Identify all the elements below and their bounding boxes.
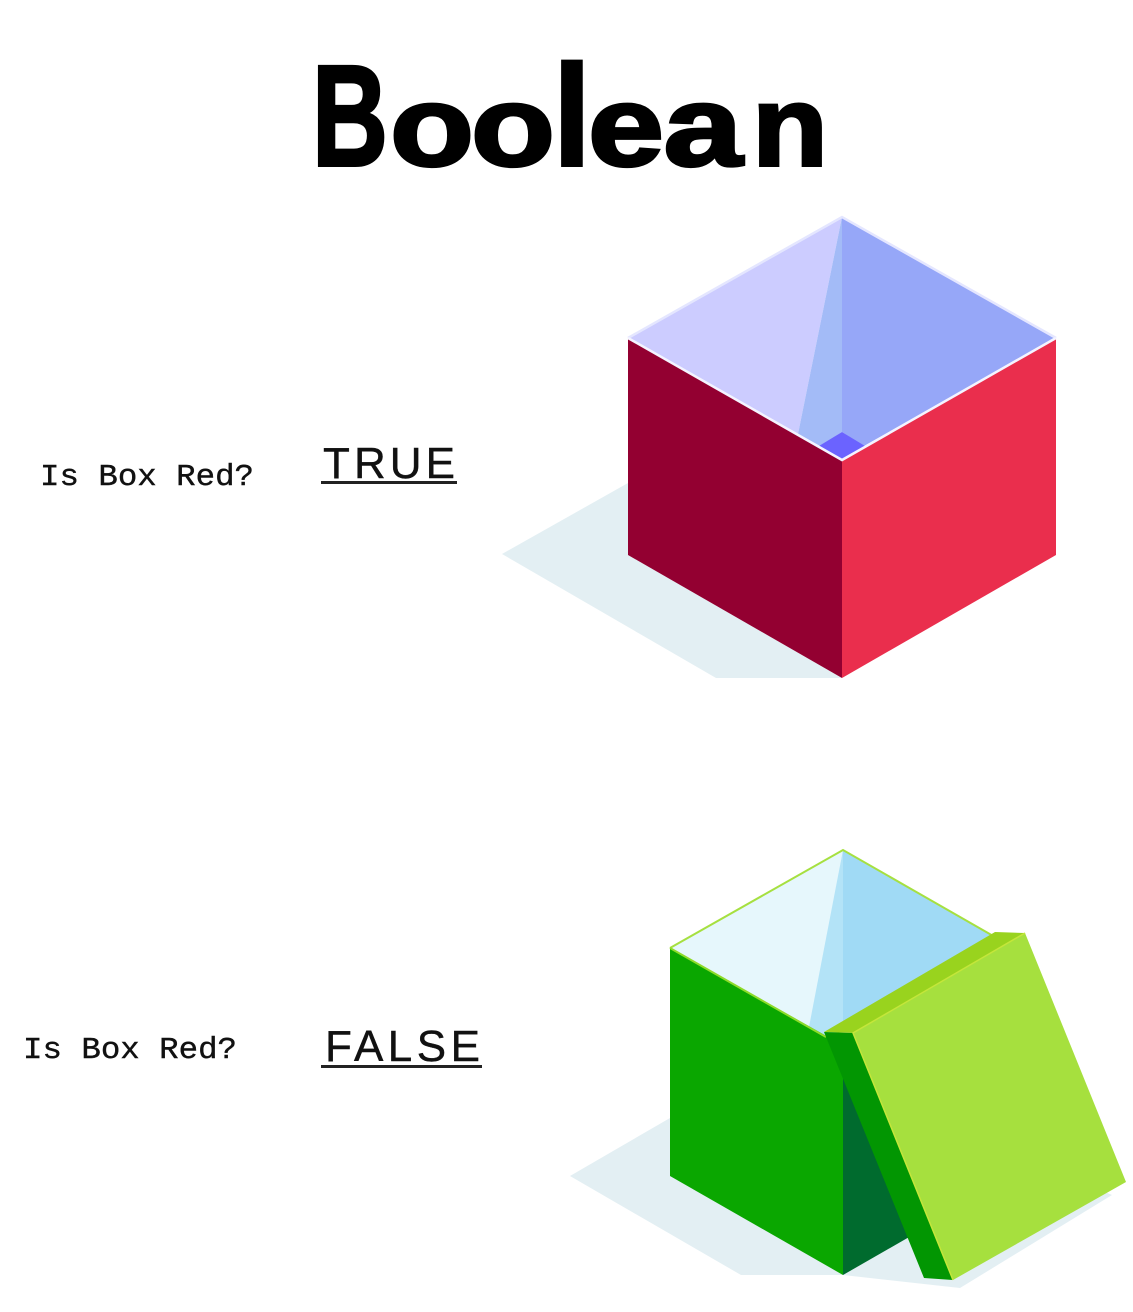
lid face [853,933,1126,1280]
dark right face [843,1070,930,1275]
box shadow [502,483,842,678]
title: a [664,64,744,190]
title: l [553,36,591,196]
front rim highlight [628,338,1056,460]
front right face [842,338,1056,678]
interior left wall [670,850,843,1027]
row label: true question: Is Box Red? [40,460,254,495]
lid top edge [824,932,1025,1033]
lid side edge [824,1032,953,1280]
front left face [628,338,842,678]
title: n [752,64,828,190]
title: B [312,36,388,196]
top rim highlight [628,217,1056,338]
interior right wall [842,217,1056,446]
interior right wall [843,850,995,1030]
box shadow [570,1100,1112,1288]
icon: red box, open [502,217,1056,678]
interior left wall [628,217,842,434]
answer: TRUE: TRUE [323,439,455,488]
lid edge highlight [853,933,1025,1280]
row label: false question: Is Box Red? [23,1033,237,1068]
interior centre strip [798,217,842,446]
title: o [390,64,474,190]
front left face [670,948,843,1275]
answer: FALSE: FALSE [325,1022,480,1071]
title: o [471,64,555,190]
rim highlight [670,850,995,948]
interior centre strip [809,850,843,1040]
icon: green box with lid [570,850,1126,1288]
rim highlight front [670,948,826,1037]
title: e [588,64,664,190]
interior floor [819,432,865,460]
